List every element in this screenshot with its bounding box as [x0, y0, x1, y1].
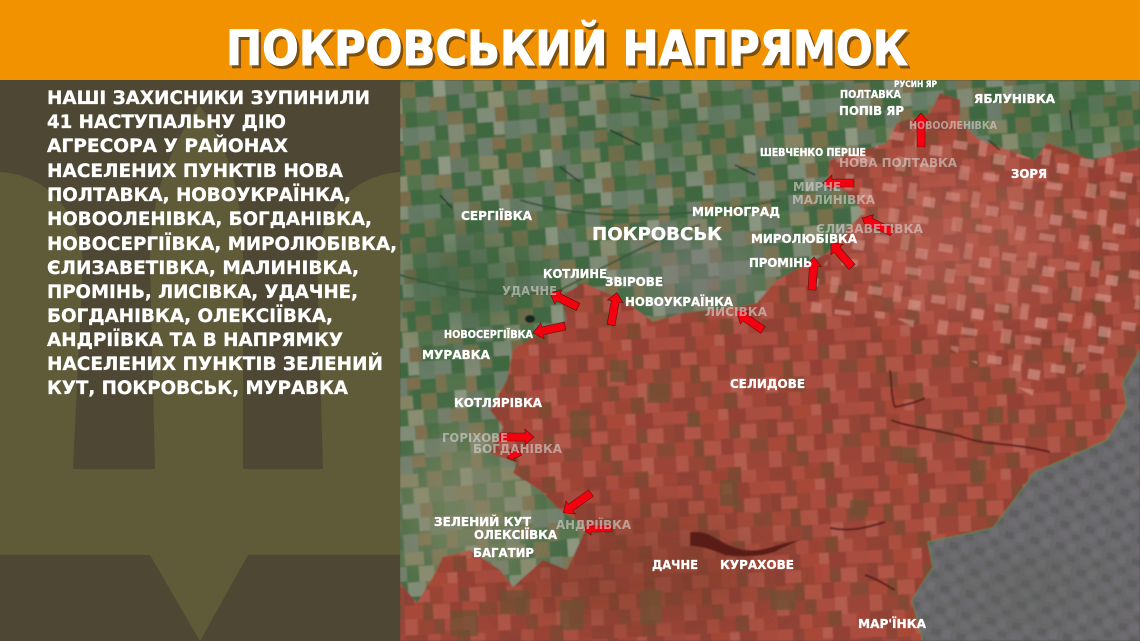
map labels: settlements: РУСИН ЯР: [894, 80, 937, 90]
text block: summary: НАСЕЛЕНИХ ПУНКТІВ НОВА: [47, 160, 343, 182]
map labels: settlements: КОТЛИНЕ: [543, 266, 607, 281]
map labels: settlements: КУРАХОВЕ: [720, 557, 794, 572]
map labels: settlements: КОТЛЯРІВКА: [454, 395, 542, 410]
text block: summary: БОГДАНІВКА, ОЛЕКСІЇВКА,: [47, 303, 333, 327]
text block: summary: 41 НАСТУПАЛЬНУ ДІЮ: [47, 111, 286, 133]
map labels: settlements: СЕЛИДОВЕ: [730, 376, 805, 391]
text block: summary: АНДРІЇВКА ТА В НАПРЯМКУ: [47, 327, 343, 351]
map labels: settlements: МИРНОГРАД: [692, 204, 780, 219]
front line edge: [912, 350, 1140, 641]
darker larger fields: [450, 360, 1003, 636]
map labels: settlements: ЗОРЯ: [1011, 166, 1047, 181]
map labels: settlements: ПОЛТАВКА: [840, 89, 902, 101]
text block: summary: КУТ, ПОКРОВСЬК, МУРАВКА: [47, 377, 348, 399]
map labels: settlements: ПОКРОВСЬК: [592, 224, 722, 245]
map labels: settlements: ЄЛИЗАВЕТІВКА: [816, 221, 923, 236]
map labels: settlements: ЗЕЛЕНИЙ КУТ: [434, 514, 531, 529]
map: satellite terrain: [400, 80, 1140, 641]
map labels: settlements: НОВА ПОЛТАВКА: [839, 155, 957, 170]
text block: summary: ПОЛТАВКА, НОВОУКРАЇНКА,: [47, 182, 351, 206]
left text panel background: [0, 80, 400, 641]
text block: summary: НАШІ ЗАХИСНИКИ ЗУПИНИЛИ: [47, 87, 370, 109]
map labels: settlements: НОВОСЕРГІЇВКА: [444, 327, 534, 341]
map labels: settlements: СЕРГІЇВКА: [461, 208, 532, 223]
map labels: settlements: ПРОМІНЬ: [749, 255, 812, 270]
title: ПОКРОВСЬКИЙ НАПРЯМОК: [228, 23, 910, 80]
map labels: settlements: НОВООЛЕНІВКА: [909, 120, 998, 132]
map labels: settlements: ЗВІРОВЕ: [605, 274, 663, 289]
map labels: settlements: ДАЧНЕ: [652, 557, 698, 572]
map labels: settlements: АНДРІЇВКА: [556, 517, 631, 532]
map labels: settlements: МИРНЕ: [793, 179, 841, 194]
map labels: settlements: МИРОЛЮБІВКА: [751, 231, 857, 246]
title: ПОКРОВСЬКИЙ НАПРЯМОК: [226, 20, 908, 77]
text block: summary: [47, 87, 397, 399]
arrows: attack directions: [500, 113, 929, 535]
pond near Novoserhiivka: [525, 315, 535, 323]
map labels: settlements: ЯБЛУНІВКА: [974, 91, 1055, 106]
map labels: settlements: НОВОУКРАЇНКА: [625, 294, 733, 309]
map labels: settlements: МАЛИНІВКА: [792, 192, 875, 207]
gullies in occupied area: [830, 370, 1050, 590]
territory: occupied area in red: [400, 90, 1140, 641]
map labels: settlements: ПОПІВ ЯР: [839, 103, 904, 118]
map labels: settlements: ГОРІХОВЕ: [442, 430, 508, 445]
map labels: settlements: УДАЧНЕ: [502, 283, 557, 298]
text block: summary: НОВОСЕРГІЇВКА, МИРОЛЮБІВКА,: [47, 231, 397, 255]
text block: summary: ПРОМІНЬ, ЛИСІВКА, УДАЧНЕ,: [47, 281, 358, 303]
map labels: settlements: БОГДАНІВКА: [473, 441, 562, 456]
map labels: settlements: МУРАВКА: [422, 347, 490, 362]
road lines: [400, 200, 780, 294]
text block: summary: АГРЕСОРА У РАЙОНАХ: [47, 134, 288, 157]
header bar: [0, 0, 1140, 80]
text block: summary: ЄЛИЗАВЕТІВКА, МАЛИНІВКА,: [47, 257, 359, 279]
map labels: settlements: ШЕВЧЕНКО ПЕРШЕ: [760, 147, 866, 159]
text block: summary: НАСЕЛЕНИХ ПУНКТІВ ЗЕЛЕНИЙ: [47, 352, 383, 375]
map labels: settlements: БАГАТИР: [473, 545, 534, 560]
map labels: settlements: [422, 80, 1055, 631]
map labels: settlements: ЛИСІВКА: [705, 304, 767, 319]
text block: summary: НОВООЛЕНІВКА, БОГДАНІВКА,: [47, 208, 372, 230]
reservoir: Kurakhove: [690, 532, 800, 556]
icon: trident emblem: [0, 105, 400, 641]
map labels: settlements: ОЛЕКСІЇВКА: [474, 527, 557, 542]
map labels: settlements: МАР'ЇНКА: [858, 616, 926, 631]
dark gullies in free area: [440, 95, 1072, 208]
